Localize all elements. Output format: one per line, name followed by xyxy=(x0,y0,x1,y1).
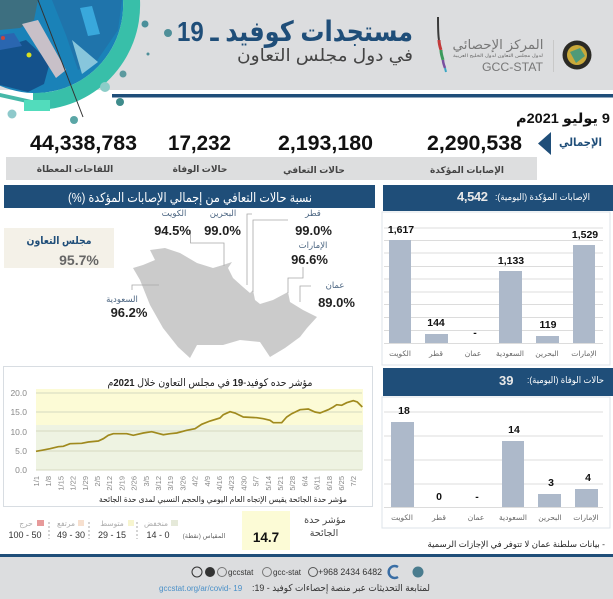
legend: critical xyxy=(8,519,44,540)
label: Saudi Arabia: 96.2% xyxy=(111,305,148,320)
line chart: severity index: 0.0 xyxy=(15,465,27,475)
line chart: severity index: 5/21 xyxy=(276,476,285,491)
label: Kuwait xyxy=(154,208,191,238)
line chart: severity index: 4/9 xyxy=(203,476,212,486)
line chart: severity index: 4/30 xyxy=(239,476,248,491)
legend: high: 49 - 30 xyxy=(57,530,85,540)
bar chart: daily cases: 1,133 xyxy=(498,255,524,267)
logo: GCC-STAT: المركز الإحصائي xyxy=(452,37,544,53)
label: pandemic: الجائحة xyxy=(310,528,338,539)
callout: GCC rate: مجلس التعاون xyxy=(26,235,92,247)
line chart: severity index: 3/5 xyxy=(142,476,151,486)
bar chart: daily cases: الإمارات xyxy=(571,349,597,358)
stat: confirmed: 2,290,538 xyxy=(427,132,522,155)
heading: daily deaths: حالات الوفاة (اليومية): xyxy=(527,375,604,385)
stat: vaccines: اللقاحات المعطاة xyxy=(37,164,113,174)
arrow xyxy=(538,132,551,155)
icon: covid image circle xyxy=(0,0,172,124)
label: Oman: 89.0% xyxy=(318,295,355,310)
stat: confirmed xyxy=(427,132,522,176)
line chart: severity index: 3/19 xyxy=(166,476,175,491)
logo: GCC-STAT: لدول مجلس التعاون لدول الخليج العربية xyxy=(453,53,543,58)
panel: severity scale xyxy=(8,511,346,550)
line chart: severity index: 3/26 xyxy=(178,476,187,491)
line chart: severity index: 6/11 xyxy=(313,476,322,490)
line chart: severity index: 5/28 xyxy=(288,476,297,491)
heading: daily cases xyxy=(383,185,613,211)
panel: daily confirmed cases xyxy=(382,185,613,365)
bar chart: daily cases: قطر xyxy=(428,349,443,358)
label: Qatar: 99.0% xyxy=(295,223,332,238)
legend: medium: 29 - 15 xyxy=(98,530,126,540)
header banner xyxy=(0,0,613,124)
callout: GCC rate: 95.7% xyxy=(59,252,99,268)
footer link line: لمتابعة التحديثات عبر منصة إحصاءات كوفيد - 19: xyxy=(252,583,430,594)
label: UAE: 96.6% xyxy=(291,252,328,267)
label: total: الإجمالي xyxy=(559,137,602,149)
line chart: severity index: 5/7 xyxy=(252,476,261,486)
callout: GCC rate xyxy=(4,228,114,268)
footer link line xyxy=(159,583,430,594)
legend: medium: متوسط xyxy=(100,519,124,528)
line chart: severity index: 4/2 xyxy=(191,476,200,486)
bar chart: daily cases: عمان xyxy=(465,349,481,358)
bar chart: daily deaths: 3 xyxy=(548,477,554,489)
legend: critical: حرج xyxy=(19,519,33,528)
legend: low xyxy=(144,519,178,540)
bar chart: daily deaths: الإمارات xyxy=(573,513,599,522)
contact details: gccstat xyxy=(228,568,254,577)
line chart: severity index: 7/2 xyxy=(349,476,358,486)
label: severity index: مؤشر حدة xyxy=(304,515,346,526)
line chart: severity index xyxy=(10,388,363,491)
bar chart: daily deaths: 18 xyxy=(398,405,410,417)
contact details: gcc-stat xyxy=(273,568,302,577)
line chart: severity index: 2/26 xyxy=(130,476,139,491)
stat: deaths xyxy=(168,132,231,175)
legend: critical: 100 - 50 xyxy=(8,530,42,540)
label: Qatar: قطر xyxy=(304,208,321,218)
contact details xyxy=(192,566,424,578)
panel: daily deaths xyxy=(382,368,613,550)
subtitle: في دول مجلس التعاون xyxy=(237,46,413,66)
heading: daily deaths: 39 xyxy=(499,373,513,388)
logo: GCC-STAT: GCC-STAT xyxy=(482,60,544,74)
totals strip xyxy=(6,132,602,180)
bar chart: daily cases: 1,617 xyxy=(388,224,414,236)
bar chart: daily cases: 144 xyxy=(427,317,445,329)
heading: recovery rate xyxy=(4,185,375,208)
label: UAE xyxy=(291,240,328,267)
label: Saudi Arabia xyxy=(106,294,148,320)
heading: daily cases: 4,542 xyxy=(457,189,488,204)
line chart: severity index: 2/19 xyxy=(117,476,126,491)
stat: vaccines: 44,338,783 xyxy=(30,132,137,155)
label: scale: المقياس (نقطة) xyxy=(183,533,226,540)
heading: daily cases: الإصابات المؤكدة (اليومية): xyxy=(495,192,590,203)
bar chart: daily cases: - xyxy=(473,327,477,339)
line chart: severity index: 2/5 xyxy=(93,476,102,486)
label: Bahrain: 99.0% xyxy=(204,223,241,238)
line chart: severity index: 4/16 xyxy=(215,476,224,491)
legend: low: 14 - 0 xyxy=(146,530,170,540)
bar chart: daily deaths: 4 xyxy=(585,472,591,484)
callout: severity value xyxy=(242,511,290,550)
line chart: severity index: 5/14 xyxy=(264,476,273,491)
bar chart: daily deaths: 0 xyxy=(436,491,442,503)
map: GCC countries xyxy=(133,248,317,358)
label: Bahrain xyxy=(204,208,241,238)
bar chart: daily cases: البحرين xyxy=(535,349,559,358)
line chart: severity index: 6/4 xyxy=(300,476,309,486)
bar chart: daily deaths: - xyxy=(475,491,479,503)
footer link line: gccstat.org/ar/covid- 19 xyxy=(159,584,243,593)
line chart: severity index: 10.0 xyxy=(10,427,27,437)
stat: recoveries: 2,193,180 xyxy=(278,132,373,155)
bar chart: daily deaths xyxy=(384,405,603,522)
footer xyxy=(0,554,613,599)
line chart: severity index: 2/12 xyxy=(105,476,114,491)
bar chart: daily deaths: عمان xyxy=(468,513,484,522)
legend: high xyxy=(57,519,85,540)
line chart: severity index: 1/8 xyxy=(44,476,53,486)
title: مستجدات كوفيد ـ 19 xyxy=(177,16,413,48)
chart title: مؤشر حده كوفيد-19 في مجلس التعاون خلال 2021م xyxy=(108,377,312,389)
label: Bahrain: البحرين xyxy=(210,208,236,218)
legend: low: منخفض xyxy=(144,519,168,528)
label: UAE: الإمارات xyxy=(299,240,327,251)
stat: confirmed: الإصابات المؤكدة xyxy=(430,165,504,176)
bar chart: daily cases: 119 xyxy=(540,319,557,331)
line chart: severity index: 1/22 xyxy=(69,476,78,491)
bar chart: daily deaths: السعودية xyxy=(499,513,527,522)
bar chart: daily deaths: قطر xyxy=(431,513,446,522)
line chart: severity index: 20.0 xyxy=(10,388,27,398)
label: Oman xyxy=(318,280,355,310)
legend: high: مرتفع xyxy=(57,519,75,528)
line chart: severity index: 4/23 xyxy=(227,476,236,491)
label: Qatar xyxy=(295,208,332,238)
bar chart: daily cases xyxy=(384,224,603,358)
label: Kuwait: الكويت xyxy=(162,208,186,218)
bar chart: daily cases: 1,529 xyxy=(572,229,598,241)
stat: vaccines xyxy=(30,132,137,174)
line chart: severity index: 1/15 xyxy=(56,476,65,491)
bar chart: daily cases: الكويت xyxy=(389,349,411,358)
chart note: مؤشر حدة الجائحة يقيس الإتجاه العام اليومي والحجم النسبي لمدى حدة الجائحة xyxy=(99,495,347,505)
line chart: severity index: 15.0 xyxy=(10,407,27,417)
stat: recoveries: حالات التعافي xyxy=(283,165,345,175)
footnote: Oman data: - بيانات سلطنة عمان لا تتوفر في الإجازات الرسمية xyxy=(428,539,605,550)
callout: severity value: 14.7 xyxy=(253,530,279,545)
panel: recovery rate map xyxy=(4,185,375,358)
line chart: severity index: 5.0 xyxy=(15,446,27,456)
bar chart: daily deaths: البحرين xyxy=(538,513,562,522)
line chart: severity index: 1/29 xyxy=(81,476,90,491)
stat: deaths: 17,232 xyxy=(168,132,231,155)
bar chart: daily deaths: 14 xyxy=(508,424,520,436)
legend: medium xyxy=(98,519,134,540)
stat: deaths: حالات الوفاة xyxy=(173,164,227,175)
line chart: severity index: 3/12 xyxy=(154,476,163,491)
bar chart: daily deaths: الكويت xyxy=(391,513,413,522)
label: Saudi Arabia: السعودية xyxy=(106,294,138,304)
contact details: +968 2434 6482 xyxy=(318,567,382,577)
heading: daily deaths xyxy=(383,368,613,396)
icon: teal ring xyxy=(33,0,140,110)
line chart: severity index: 6/25 xyxy=(337,476,346,491)
heading: recovery rate: نسبة حالات التعافي من إجمالي الإصابات المؤكدة (%) xyxy=(68,190,312,206)
date: 9 يوليو 2021م xyxy=(516,110,610,127)
label: Oman: عمان xyxy=(326,280,344,290)
stat: recoveries xyxy=(278,132,373,175)
line chart: severity index: 6/18 xyxy=(325,476,334,491)
label: Kuwait: 94.5% xyxy=(154,223,191,238)
line chart: severity index: 1/1 xyxy=(32,476,41,486)
bar chart: daily cases: السعودية xyxy=(496,349,524,358)
panel: severity index line chart xyxy=(4,366,372,506)
logo: GCC-STAT xyxy=(438,17,592,74)
